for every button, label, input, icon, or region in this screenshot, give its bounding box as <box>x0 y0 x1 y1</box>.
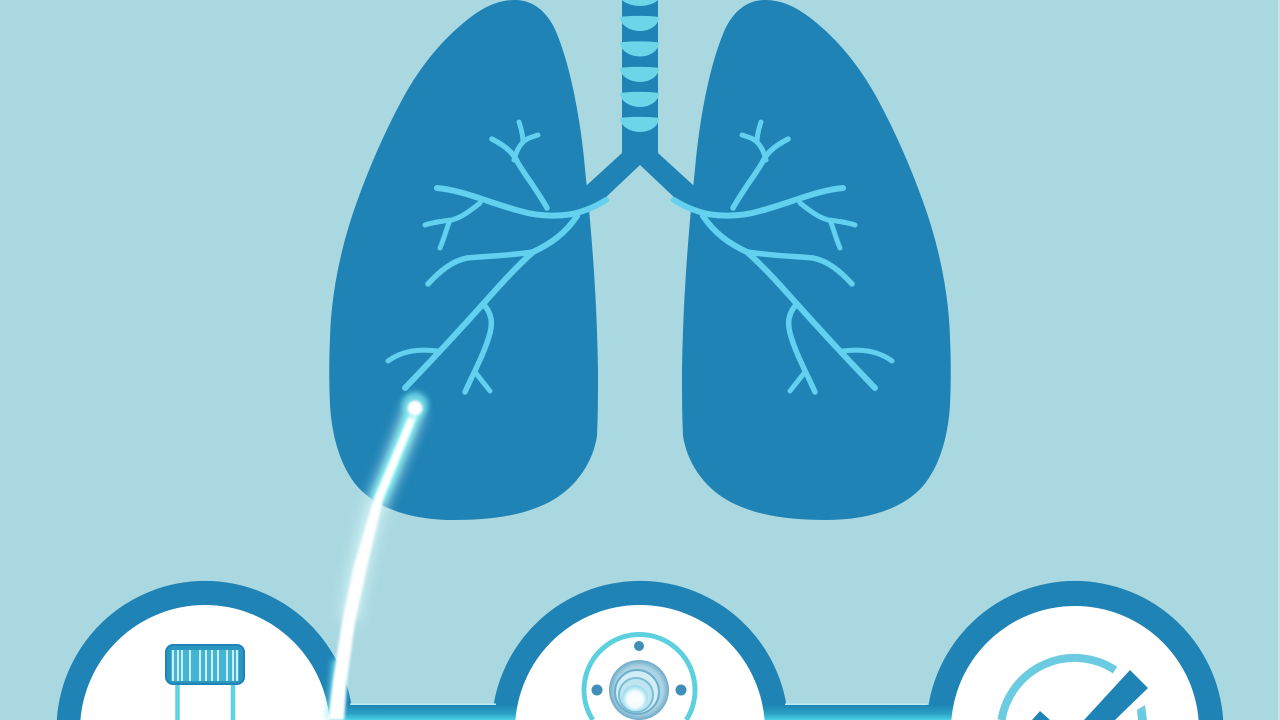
right bronchial tree <box>674 122 892 392</box>
icon: specimen bottle <box>166 645 244 720</box>
trachea and main bronchi <box>565 0 715 214</box>
circle frame: scope step <box>492 581 788 720</box>
left bronchial tree <box>388 122 606 392</box>
connector bar between circles <box>320 704 960 720</box>
icon: bronchoscope lens <box>584 635 695 720</box>
icon: result check mark <box>1002 658 1148 720</box>
white disc: sample step <box>80 605 330 720</box>
light beam from scope into the lung <box>328 392 428 720</box>
circle frame: sample step <box>57 581 353 720</box>
left lung <box>329 0 598 520</box>
right lung <box>682 0 951 520</box>
right edge highlight <box>1278 0 1280 720</box>
circle frame: result step <box>927 581 1223 720</box>
trachea cartilage rings <box>620 0 659 132</box>
white disc: scope step <box>515 605 765 720</box>
white disc: result step <box>951 606 1199 720</box>
